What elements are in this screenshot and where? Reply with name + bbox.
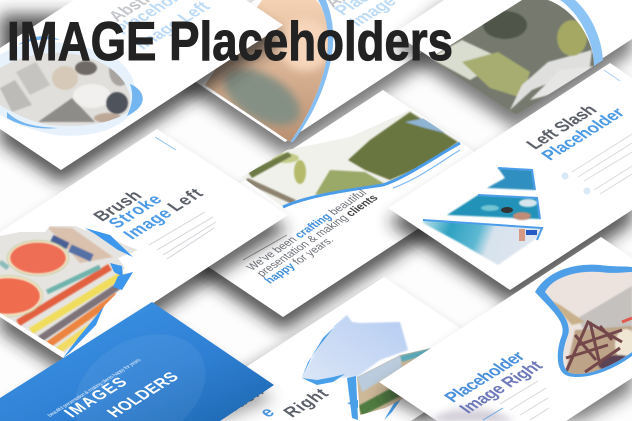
body lines bbox=[500, 381, 549, 420]
heading: Left Slash bbox=[522, 102, 601, 152]
slide: center quote bbox=[190, 90, 476, 340]
quote text: presentation & making clients bbox=[254, 193, 381, 279]
photo: grass and palm bbox=[242, 110, 460, 207]
slide: blue images placeholders cover bbox=[0, 302, 274, 421]
decorative circle bbox=[54, 312, 226, 421]
cover title: IMAGES bbox=[61, 375, 132, 420]
slide: left slash placeholder: Placeholder bbox=[537, 105, 629, 163]
slide: brush stroke image left: Image bbox=[119, 205, 176, 242]
body lines bbox=[149, 212, 216, 259]
blue stroke under photo bbox=[283, 143, 460, 207]
quote text: happy for years. bbox=[262, 235, 337, 286]
pale brush swoosh bbox=[0, 42, 135, 136]
heading: Image Left bbox=[130, 0, 215, 52]
blue brush stroke bbox=[290, 0, 333, 142]
slide: blue images placeholders cover: HOLDERS bbox=[104, 370, 183, 420]
quote text: We've been crafting beautiful bbox=[244, 188, 370, 273]
slide: brush image right: e bbox=[255, 404, 279, 420]
slide: brush image right: Right bbox=[279, 385, 333, 420]
slide: placeholder image right: Image Right bbox=[455, 358, 547, 416]
lavender shade bbox=[428, 400, 515, 421]
blue brush stroke bbox=[560, 0, 603, 66]
accent line bbox=[155, 137, 176, 150]
slide: brush stroke image left bbox=[0, 129, 288, 374]
slide: abstract placeholder image left bbox=[0, 0, 283, 184]
slash photo: top bbox=[487, 168, 535, 190]
blue brush edges bbox=[63, 228, 133, 358]
slide: brush stroke image left: Stroke bbox=[104, 191, 166, 231]
small caption: beautiful presentation & making clients happy for years. bbox=[47, 357, 144, 418]
slide: brush stroke image left: Left bbox=[163, 185, 208, 214]
divider line bbox=[243, 235, 287, 260]
heading: Placeholder bbox=[440, 348, 530, 405]
slash photo: bottom bbox=[423, 220, 542, 265]
photo: couple at window bbox=[0, 53, 130, 126]
slide: placeholder image right bbox=[379, 237, 632, 421]
photo: green van under palms bbox=[430, 0, 594, 115]
slide: van photo bbox=[394, 0, 632, 129]
heading: Brush bbox=[211, 383, 268, 420]
blue blob outline bbox=[535, 265, 632, 377]
photo: pale sky brush bbox=[302, 315, 408, 382]
accent line bbox=[483, 408, 503, 420]
blue brush swoosh bbox=[7, 36, 143, 129]
photo: woman with long hair bbox=[205, 0, 328, 142]
slide: brush image right bbox=[228, 277, 461, 421]
photo: pier at sea bbox=[545, 272, 632, 374]
slash photo: middle bbox=[447, 195, 540, 220]
slide: abstract placeholder image right bbox=[180, 0, 440, 160]
bullet dots bbox=[562, 172, 568, 180]
slide: left slash placeholder bbox=[388, 63, 632, 304]
body lines bbox=[572, 134, 632, 194]
title: IMAGE Placeholders bbox=[7, 10, 453, 72]
heading: Brush bbox=[89, 187, 146, 224]
photo: city skyline bbox=[357, 348, 431, 415]
blue brush accents bbox=[302, 315, 408, 420]
accent line bbox=[604, 70, 620, 81]
photo: watermelon on striped towel bbox=[0, 222, 143, 357]
